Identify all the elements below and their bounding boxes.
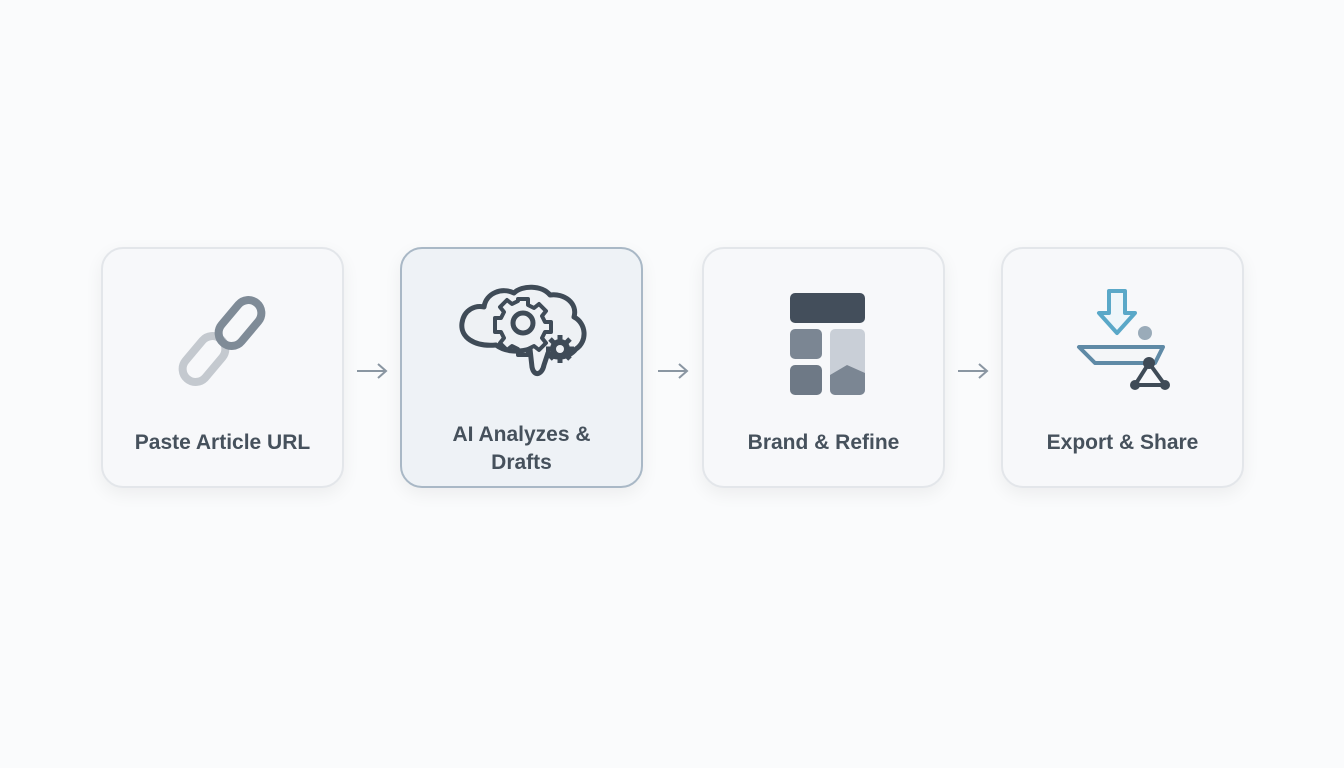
label: Brand & Refine bbox=[748, 431, 899, 454]
panel: brand & refine bbox=[702, 247, 945, 488]
arrow 2 bbox=[658, 363, 688, 379]
icon: chain link bbox=[178, 296, 266, 386]
label: AI Analyzes & bbox=[452, 423, 591, 446]
panel: export & share bbox=[1001, 247, 1244, 488]
icon: layout grid bbox=[790, 293, 865, 395]
icon: brain with gears bbox=[459, 284, 587, 376]
label: Drafts bbox=[491, 451, 552, 474]
panel: paste article url bbox=[101, 247, 344, 488]
arrow 1 bbox=[357, 363, 388, 379]
label: Paste Article URL bbox=[135, 431, 310, 454]
panel: AI analyzes bbox=[400, 247, 643, 488]
arrow 3 bbox=[958, 363, 988, 379]
icon: download export bbox=[1076, 289, 1170, 390]
label: Export & Share bbox=[1047, 431, 1198, 454]
label bbox=[452, 423, 591, 474]
